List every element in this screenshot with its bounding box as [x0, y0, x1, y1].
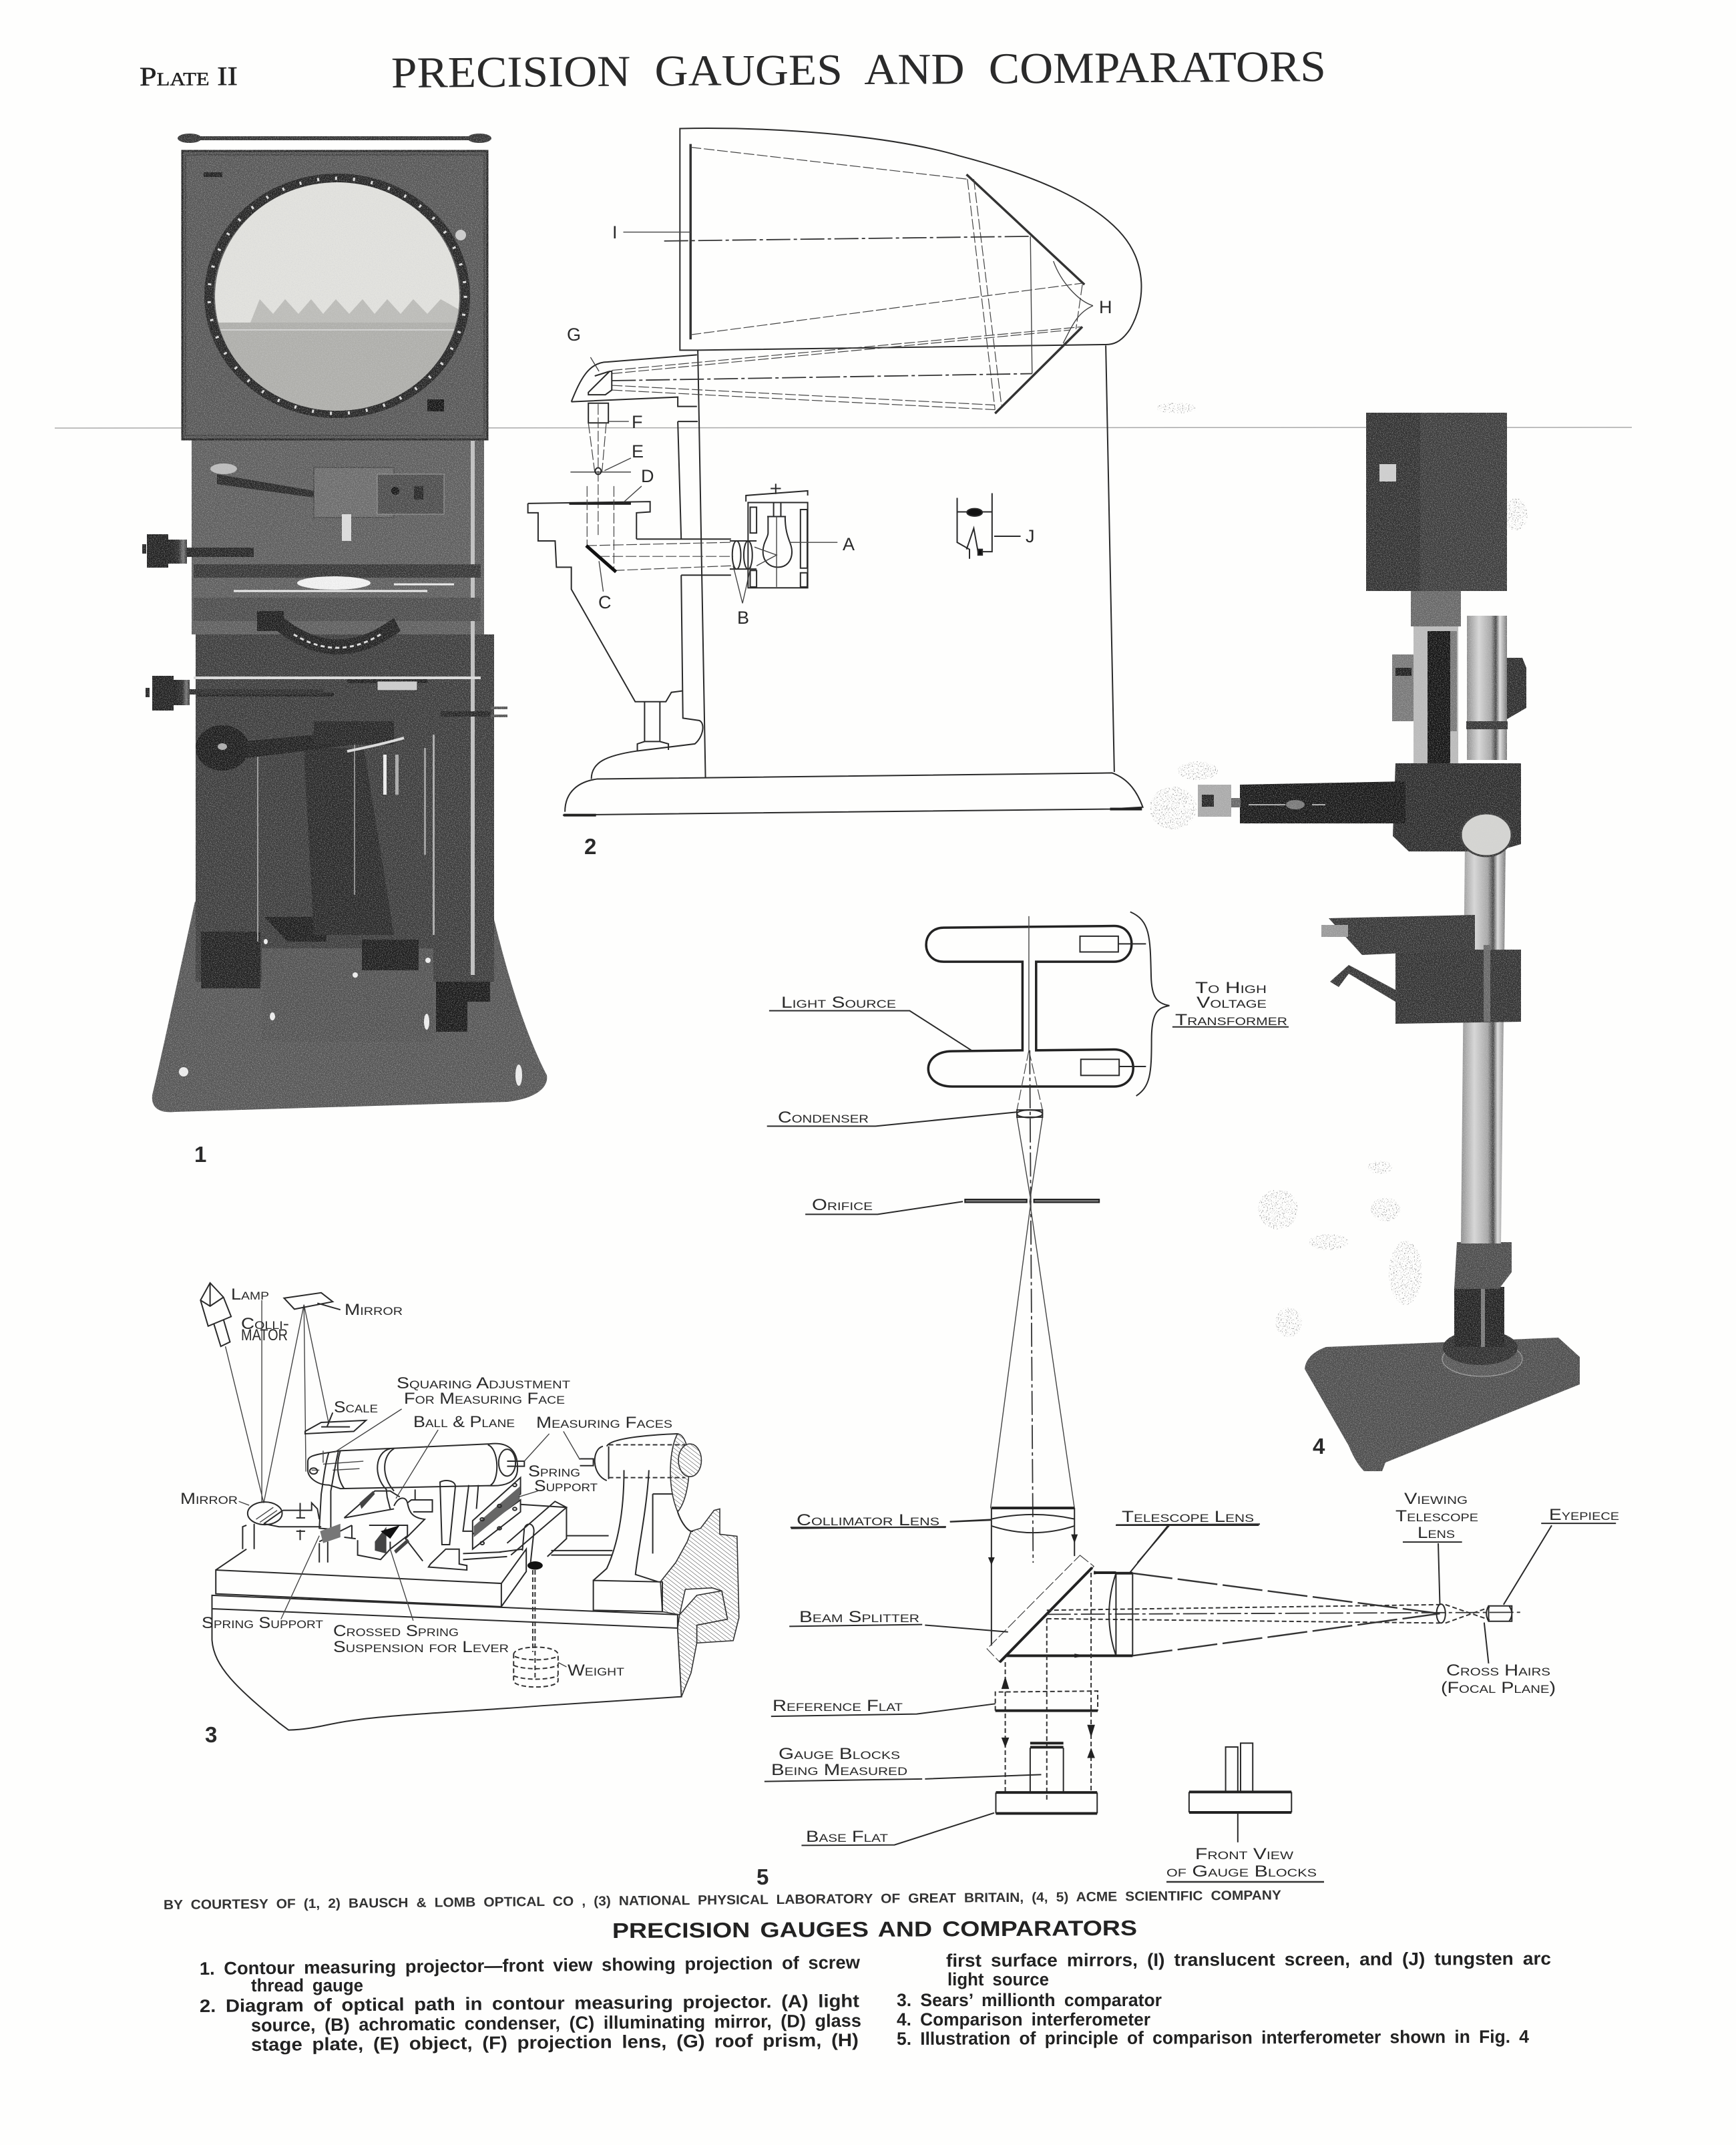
label: orifice: Orifice — [812, 1196, 873, 1214]
label: eyepiece: Eyepiece — [1549, 1506, 1619, 1524]
condenser lens — [1017, 1110, 1042, 1117]
speckle marks — [1150, 403, 1528, 1337]
right box, rod and wire loop — [507, 1501, 566, 1567]
caption left column — [200, 1952, 861, 2055]
hand wheel — [196, 708, 507, 771]
label: spring support right — [528, 1462, 598, 1495]
prism and lens — [588, 371, 612, 423]
reference flat — [996, 1691, 1098, 1711]
caption 5: 5. Illustration of principle of comparison interferometer shown in Fig. 4 — [897, 2027, 1529, 2049]
label: squaring adjustment: For Measuring Face — [404, 1390, 565, 1408]
label: crossed spring suspension: Suspension for Lever — [333, 1638, 509, 1656]
illuminator housing — [1366, 413, 1507, 591]
tailstock — [580, 1434, 693, 1611]
incoming beams — [992, 1527, 1074, 1645]
figure 4: comparison interferometer photograph — [1150, 403, 1580, 1471]
orifice plate — [965, 1199, 1099, 1202]
light rays — [612, 148, 1082, 410]
horizontal telescope — [1198, 781, 1405, 823]
figure number 2: 2 — [584, 834, 596, 859]
converging rays — [1132, 1573, 1440, 1655]
label: viewing telescope lens — [1395, 1490, 1478, 1542]
return beams — [1006, 1573, 1091, 1802]
leaders — [765, 1519, 1616, 1845]
label: front view of gauge blocks — [1166, 1845, 1324, 1882]
lamp housing — [746, 483, 808, 588]
arc lamp J — [957, 493, 1021, 559]
right bracket and spring plates — [463, 1478, 521, 1549]
screen and mirrors — [690, 144, 692, 339]
figure 2: optical path diagram — [528, 128, 1143, 859]
collimator lens — [992, 1508, 1074, 1533]
stage assembly — [1321, 915, 1521, 1024]
illuminating mirror — [586, 546, 616, 572]
label: gauge blocks being measured: Gauge Blocks — [779, 1745, 900, 1763]
lamp — [200, 1283, 231, 1346]
highlights on base — [179, 939, 522, 1086]
label: left mirror: Mirror — [180, 1490, 238, 1508]
gauge block — [1030, 1748, 1064, 1792]
label: gauge blocks being measured — [771, 1745, 907, 1779]
label: gauge blocks being measured: Being Measured — [771, 1761, 907, 1779]
label: collimator: Colli- — [241, 1315, 289, 1333]
left bracket and spring — [319, 1450, 352, 1563]
front view of blocks — [1189, 1743, 1291, 1812]
label: ball and plane: Ball & Plane — [413, 1413, 515, 1431]
triangular base — [1305, 1338, 1580, 1471]
central linkage — [345, 1489, 433, 1561]
lever cylinder — [308, 1444, 524, 1489]
caption right column — [897, 1949, 1551, 2049]
hatched section — [660, 1509, 739, 1643]
label: viewing telescope lens: Viewing — [1404, 1490, 1468, 1508]
upright and pedestal — [429, 1481, 507, 1570]
caption 2 continued — [946, 1949, 1551, 1989]
figure number 3: 3 — [205, 1722, 217, 1747]
label H: H — [1099, 297, 1112, 317]
label D: D — [641, 466, 654, 486]
caption 2 continued: first surface mirrors, (I) translucent screen, and (J) tungsten arc — [946, 1949, 1551, 1971]
caption 2: source, (B) achromatic condenser, (C) illuminating mirror, (D) glass — [251, 2011, 861, 2035]
label: squaring adjustment: Squaring Adjustment — [397, 1374, 570, 1392]
top mirror — [284, 1293, 341, 1310]
junction block — [1393, 763, 1521, 851]
label I: I — [612, 222, 618, 242]
label: to high voltage transformer: To High — [1195, 979, 1267, 997]
transformer brace — [1130, 912, 1169, 1096]
figure 5: comparison interferometer principle diagram — [756, 912, 1619, 1889]
micrometer knob lower — [146, 676, 323, 711]
label: top mirror: Mirror — [345, 1301, 403, 1319]
label G: G — [567, 325, 581, 345]
leader lines — [767, 1010, 1289, 1563]
base flat — [996, 1792, 1097, 1813]
casting bottom edge — [212, 1609, 682, 1730]
round mirror and bracket — [248, 1502, 282, 1525]
label A: A — [843, 534, 855, 554]
eyepiece — [1486, 1606, 1512, 1621]
viewing lens — [1437, 1604, 1446, 1623]
label J: J — [1026, 526, 1035, 546]
pillar — [1461, 844, 1506, 1243]
optical axis — [1028, 916, 1030, 1050]
column body — [192, 439, 494, 1042]
caption 1: thread gauge — [251, 1975, 363, 1995]
label: scale: Scale — [334, 1398, 378, 1416]
column collar — [1442, 1242, 1522, 1376]
label: to high voltage transformer — [1175, 979, 1287, 1029]
weight — [513, 1647, 558, 1687]
caption 2: 2. Diagram of optical path in contour measuring projector. (A) light — [200, 1991, 859, 2016]
upper mechanism — [194, 463, 481, 695]
label: condenser: Condenser — [778, 1109, 869, 1127]
photo body — [1198, 413, 1580, 1471]
screen ring — [209, 178, 465, 413]
label: collimator: MATOR — [241, 1326, 288, 1344]
label: light source: Light Source — [781, 994, 896, 1012]
label: spring support left: Spring Support — [202, 1614, 323, 1632]
discharge tube — [926, 926, 1133, 1087]
caption 4: 4. Comparison interferometer — [897, 2009, 1150, 2029]
projected screw thread — [215, 182, 459, 411]
label: cross hairs — [1441, 1662, 1556, 1697]
projection head — [178, 134, 491, 439]
label: front view of gauge blocks: of Gauge Blocks — [1166, 1863, 1317, 1881]
micrometer knob upper — [142, 534, 254, 568]
condenser lenses — [730, 541, 756, 569]
figure number 1: 1 — [194, 1142, 206, 1167]
caption 2 continued: light source — [947, 1969, 1049, 1989]
label: lamp: Lamp — [231, 1286, 269, 1304]
caption 1 — [200, 1952, 861, 1995]
round knob — [1461, 813, 1512, 856]
label B: B — [737, 608, 749, 628]
leader lines — [281, 1409, 580, 1667]
label: telescope lens: Telescope Lens — [1122, 1508, 1254, 1526]
figure number 5: 5 — [756, 1865, 769, 1889]
beam splitter plate — [987, 1555, 1094, 1662]
label: base flat: Base Flat — [806, 1828, 888, 1846]
caption heading: PRECISION GAUGES AND COMPARATORS — [612, 1916, 1137, 1943]
label: beam splitter: Beam Splitter — [799, 1608, 919, 1626]
label: front view of gauge blocks: Front View — [1195, 1845, 1293, 1863]
figure 1: contour measuring projector photograph — [142, 134, 547, 1112]
caption 1: 1. Contour measuring projector—front view showing projection of screw — [200, 1952, 861, 1979]
light source and condenser section — [767, 912, 1289, 1563]
light beam lines — [226, 1300, 329, 1503]
figure 3: Sears' millionth comparator — [180, 1283, 739, 1747]
label: spring support right: Spring — [528, 1462, 580, 1481]
caption 2: stage plate, (E) object, (F) projection lens, (G) roof prism, (H) — [251, 2030, 859, 2055]
label F: F — [632, 412, 642, 432]
plate number: Plate II — [140, 61, 238, 91]
electrodes — [1080, 936, 1146, 1075]
upper column and tube — [1392, 591, 1526, 763]
label: squaring adjustment — [397, 1374, 570, 1408]
label E: E — [632, 441, 644, 461]
figure number 4: 4 — [1313, 1434, 1325, 1458]
cabinet and base outline — [528, 128, 1143, 815]
courtesy credit line: BY COURTESY OF (1, 2) BAUSCH & LOMB OPTICAL CO , (3) NATIONAL PHYSICAL LABORATORY OF GREAT BRITAIN, (4, 5) ACME SCIENTIFIC COMPANY — [164, 1888, 1282, 1913]
label: reference flat: Reference Flat — [773, 1697, 903, 1715]
beam splitter and telescope section — [765, 1508, 1616, 1845]
label: collimator — [241, 1315, 289, 1344]
label: viewing telescope lens: Telescope — [1395, 1507, 1478, 1525]
label: cross hairs: (Focal Plane) — [1441, 1679, 1556, 1697]
label C: C — [598, 592, 612, 612]
scale — [305, 1412, 366, 1434]
projection arm and stage — [572, 355, 731, 779]
bench platform — [212, 1536, 678, 1628]
label: weight: Weight — [568, 1662, 624, 1680]
base plate — [152, 902, 547, 1112]
label: viewing telescope lens: Lens — [1418, 1524, 1455, 1542]
label: to high voltage transformer: Transformer — [1175, 1011, 1287, 1029]
label: crossed spring suspension: Crossed Spring — [333, 1622, 459, 1640]
caption 2 — [200, 1991, 861, 2055]
label: measuring faces: Measuring Faces — [536, 1414, 672, 1432]
label: crossed spring suspension — [333, 1622, 509, 1656]
label: to high voltage transformer: Voltage — [1197, 994, 1267, 1012]
caption 3: 3. Sears’ millionth comparator — [897, 1990, 1162, 2010]
line drawing — [200, 1283, 739, 1730]
title: PRECISION GAUGES AND COMPARATORS — [391, 42, 1326, 98]
label: collimator lens: Collimator Lens — [797, 1511, 939, 1529]
label: spring support right: Support — [534, 1477, 598, 1495]
main block — [216, 1537, 526, 1607]
telescope lens — [1109, 1573, 1132, 1655]
label: cross hairs: Cross Hairs — [1446, 1662, 1550, 1680]
